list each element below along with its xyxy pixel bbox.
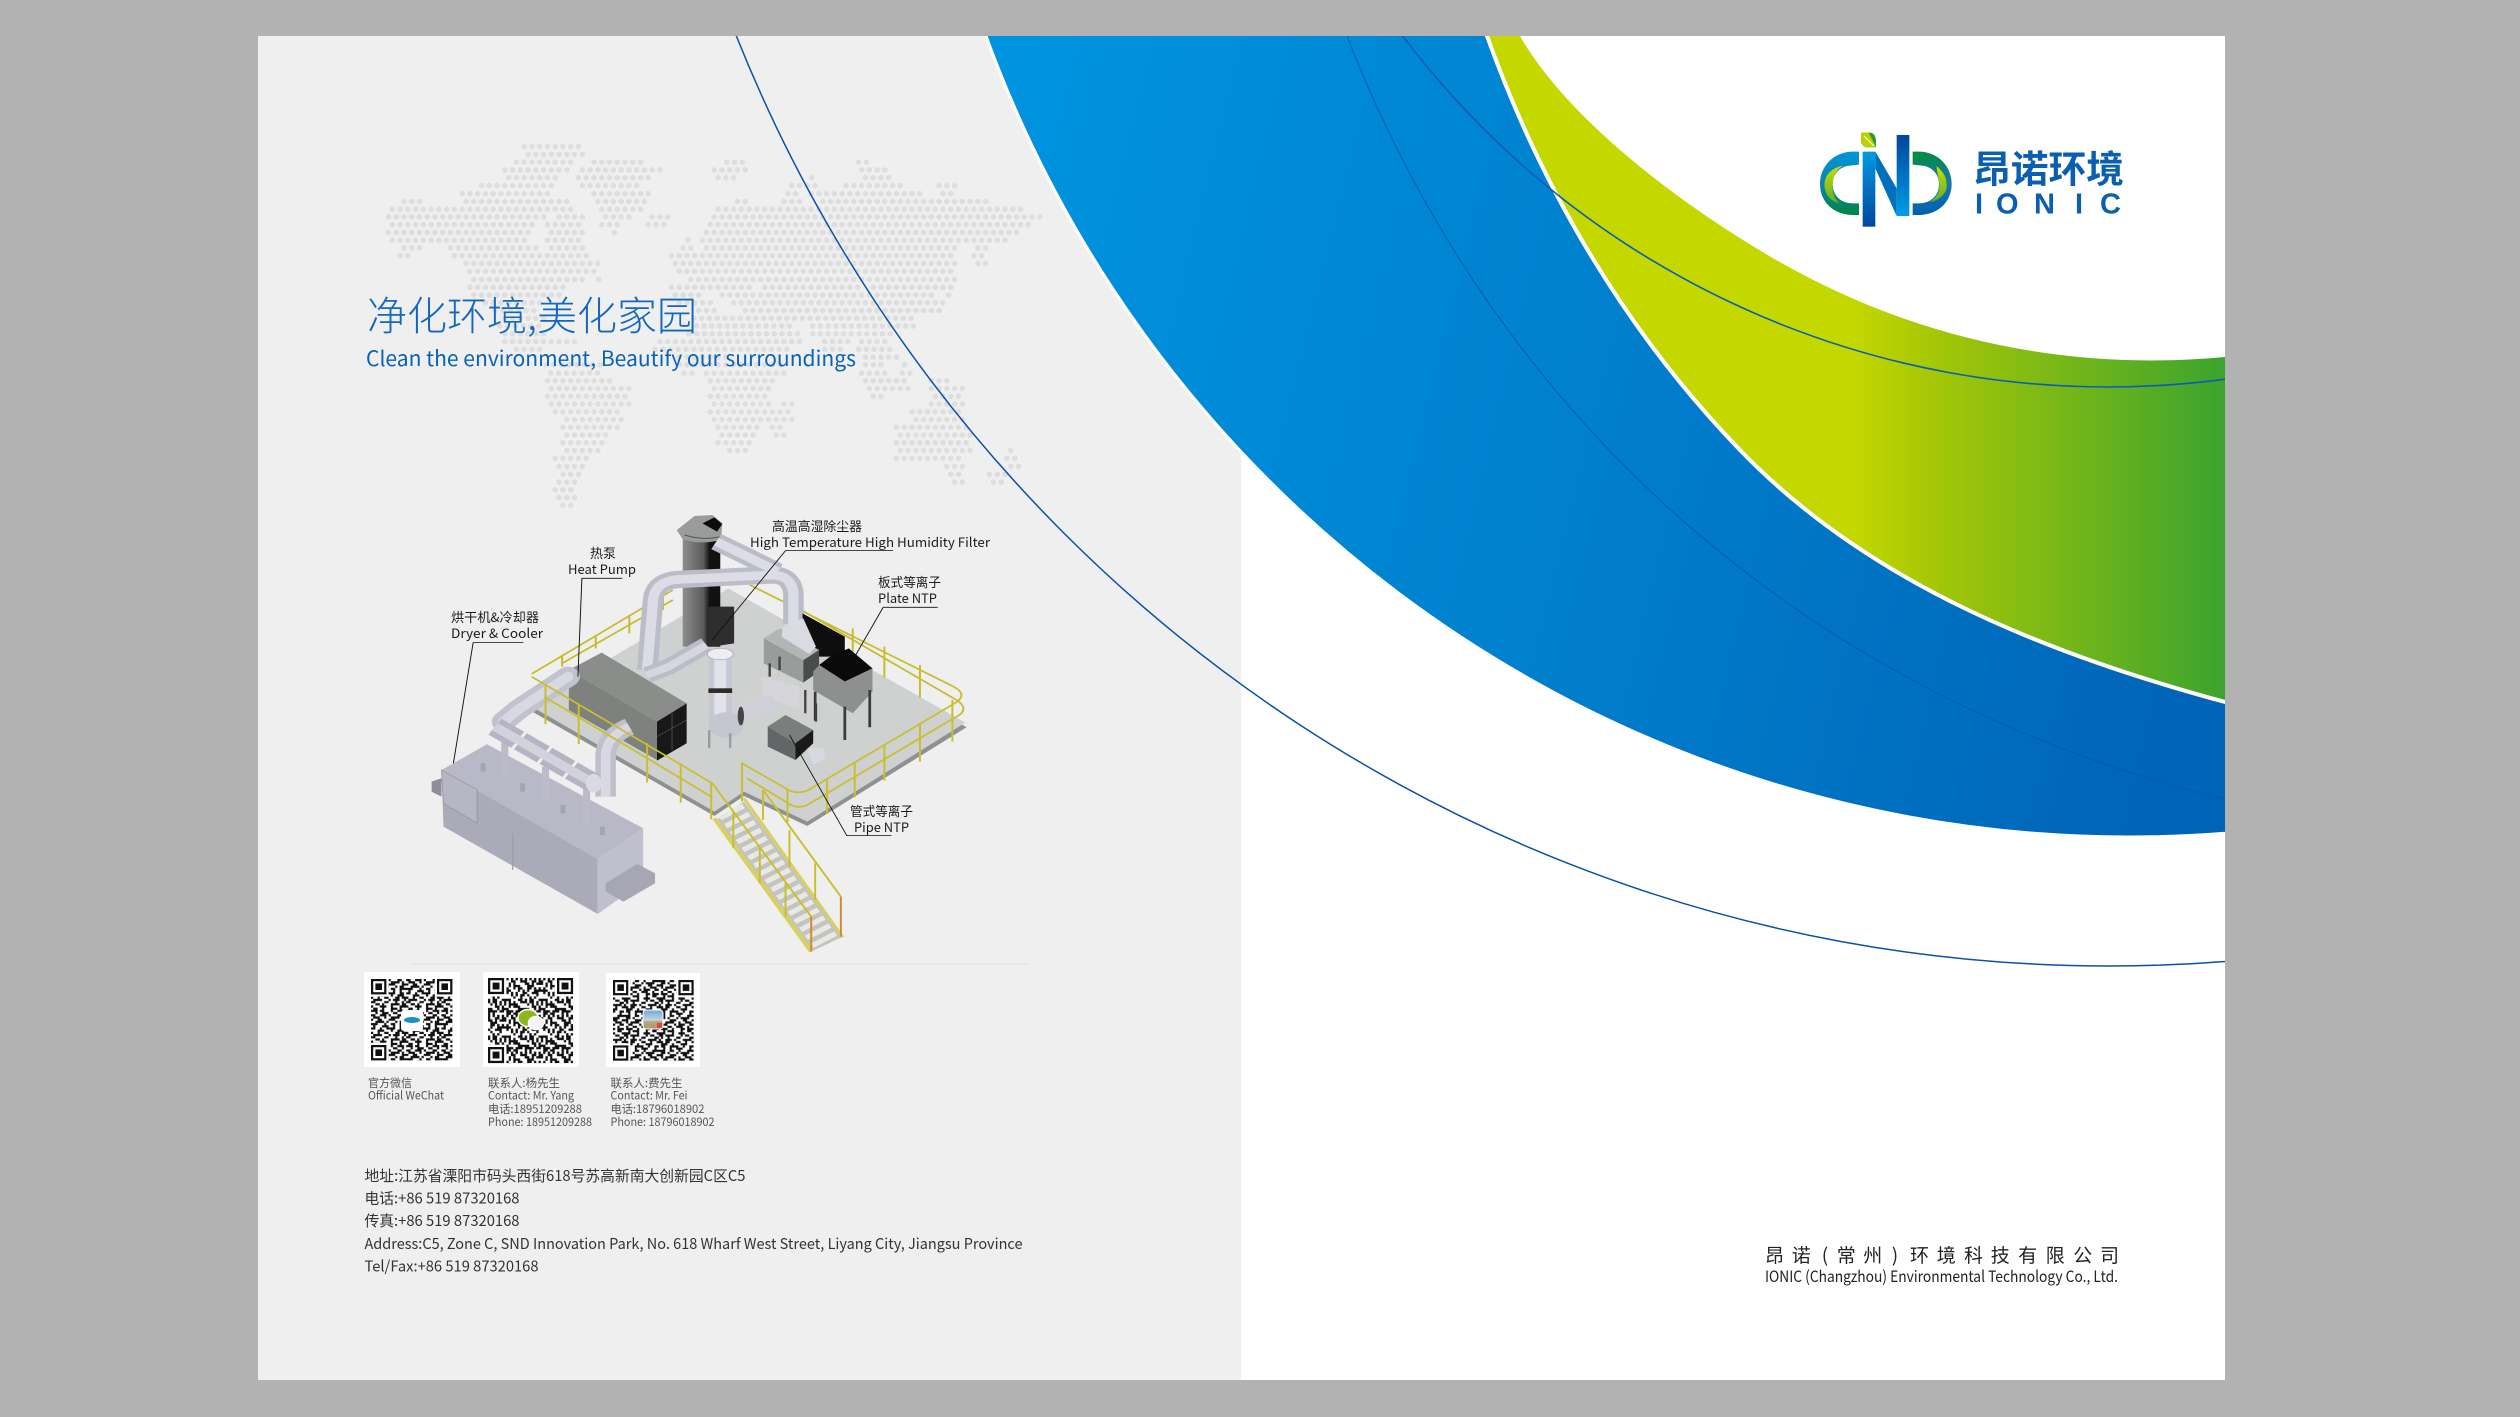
world dot map [388, 147, 1044, 505]
fan and vertical duct [707, 648, 776, 748]
icon: D arc [1913, 152, 1952, 215]
ducts [647, 542, 793, 675]
green band [1485, 36, 2225, 704]
company name: IONIC (Changzhou) Environmental Technology Co., Ltd. [1765, 1265, 2118, 1287]
caption: official WeChat: 官方微信 [368, 1075, 412, 1091]
label: plate NTP: Plate NTP [878, 588, 937, 607]
label: dryer and cooler: Dryer & Cooler [451, 623, 544, 642]
front rails [532, 677, 963, 822]
divider [410, 963, 1028, 964]
icon: N letter [1863, 135, 1909, 227]
icon: C arc [1820, 152, 1859, 215]
platform floor [530, 588, 967, 826]
address block: 地址:江苏省溧阳市码头西街618号苏高新南大创新园C区C5 [364, 1165, 746, 1186]
caption: Mr. Yang contact: Phone: 18951209288 [488, 1114, 592, 1130]
QR code: Mr. Fei [606, 973, 700, 1067]
caption: Mr. Fei contact: 电话:18796018902 [610, 1101, 704, 1117]
label: dryer and cooler: 烘干机&冷却器 [451, 607, 539, 626]
thin line: long lower arc [736, 36, 2225, 967]
caption: Mr. Yang contact [488, 1075, 592, 1130]
leader lines [453, 551, 938, 836]
address block: Tel/Fax:+86 519 87320168 [364, 1256, 538, 1276]
label: plate NTP: 板式等离子 [878, 572, 941, 591]
pipe NTP unit [768, 715, 825, 765]
tower [677, 515, 734, 647]
label: heat pump: 热泵 [590, 543, 616, 562]
subtitle: Clean the environment, Beautify our surroundings [366, 343, 856, 373]
company name [1765, 1241, 2119, 1287]
white top-right area [1520, 36, 2225, 360]
plate NTP unit [813, 648, 873, 740]
caption: Mr. Fei contact: 联系人:费先生 [610, 1075, 682, 1091]
panel: left gray page [258, 36, 1241, 1380]
caption: Mr. Yang contact: 电话:18951209288 [488, 1101, 582, 1117]
caption: Mr. Fei contact: Phone: 18796018902 [610, 1114, 714, 1130]
label: high temperature filter: High Temperature High Humidity Filter [750, 532, 991, 551]
label: high temperature filter [750, 516, 991, 551]
heat pump box [569, 653, 687, 761]
label: high temperature filter: 高温高湿除尘器 [772, 516, 862, 535]
company name: 昂诺(常州)环境科技有限公司 [1765, 1241, 2119, 1268]
address block: 电话:+86 519 87320168 [364, 1188, 520, 1208]
caption: official WeChat: Official WeChat [368, 1088, 445, 1104]
label: dryer and cooler [451, 607, 544, 642]
address block: 传真:+86 519 87320168 [364, 1210, 520, 1231]
label: heat pump [568, 543, 636, 578]
logo wordmark chinese: 昂诺环境 [1973, 138, 2124, 194]
caption: Mr. Fei contact: Contact: Mr. Fei [610, 1088, 688, 1104]
title: 净化环境,美化家园 [367, 284, 697, 342]
blue and green curved bands [736, 36, 2225, 967]
blue band [984, 36, 2225, 836]
logo [1820, 133, 2124, 227]
stairs [712, 783, 843, 952]
address block: Address:C5, Zone C, SND Innovation Park, No. 618 Wharf West Street, Liyang City, Jiangsu Province [364, 1233, 1022, 1254]
icon: leaf [1861, 133, 1876, 147]
thin line: upper arc over green [1402, 36, 2225, 388]
dryer ducts [504, 677, 629, 797]
caption: Mr. Yang contact: 联系人:杨先生 [488, 1075, 560, 1091]
caption: official WeChat [368, 1075, 445, 1104]
dryer and cooler [432, 727, 655, 914]
back rails [532, 585, 954, 698]
diagram: plant equipment [432, 515, 991, 952]
QR code: official WeChat [364, 972, 460, 1067]
label: pipe NTP: 管式等离子 [850, 801, 913, 820]
address block [364, 1165, 1022, 1276]
label: heat pump: Heat Pump [568, 559, 636, 578]
panel: right white page [1241, 36, 2225, 1380]
label: plate NTP [878, 572, 941, 607]
left filter unit [762, 613, 845, 722]
QR code: Mr. Yang [483, 972, 579, 1067]
caption: Mr. Yang contact: Contact: Mr. Yang [488, 1088, 574, 1104]
label: pipe NTP: Pipe NTP [854, 817, 909, 836]
label: pipe NTP [850, 801, 913, 836]
thin line: inner dark arc [1347, 36, 2224, 799]
caption: Mr. Fei contact [610, 1075, 714, 1130]
logo wordmark latin: IONIC [1975, 188, 2121, 220]
